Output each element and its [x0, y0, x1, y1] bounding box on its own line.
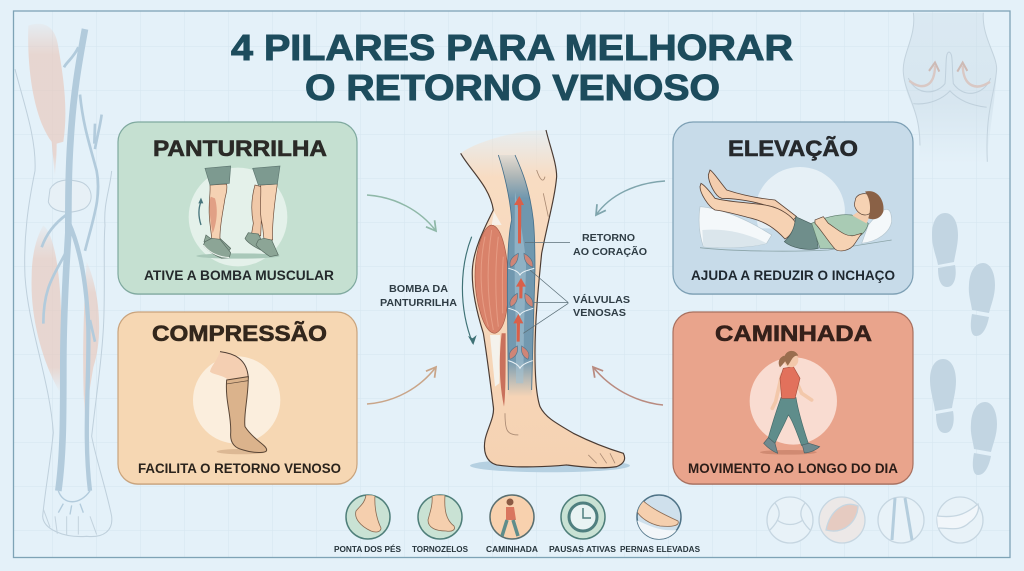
arrow: elevação to leg [596, 181, 665, 215]
label: retorno ao coração: RETORNO [582, 233, 635, 244]
title: O RETORNO VENOSO [305, 67, 720, 108]
arrow: compressão to leg [367, 367, 436, 404]
vein flow arrows [513, 196, 526, 342]
label: bomba da panturrilha [380, 284, 457, 309]
icon: pernas elevadas [620, 495, 700, 554]
venous valves [509, 253, 533, 359]
icon: calf raise legs [189, 166, 287, 266]
icon: compression stocking [193, 352, 280, 454]
heading: elevação: ELEVAÇÃO [728, 136, 858, 161]
label: retorno ao coração: AO CORAÇÃO [573, 245, 647, 258]
icon: caminhada [486, 495, 538, 554]
caption: caminhada: MOVIMENTO AO LONGO DO DIA [688, 461, 898, 476]
panel: elevação [673, 122, 913, 295]
heading: compressão: COMPRESSÃO [152, 321, 327, 346]
caption: compressão: FACILITA O RETORNO VENOSO [138, 461, 341, 476]
calf muscle [475, 212, 508, 333]
panel: panturrilha [118, 122, 357, 295]
caption: panturrilha: ATIVE A BOMBA MUSCULAR [144, 268, 334, 283]
background illustration: leg anatomy [15, 24, 112, 537]
icon: tornozelos: TORNOZELOS [412, 544, 468, 554]
label: bomba da panturrilha: BOMBA DA [389, 284, 448, 295]
caption: elevação: AJUDA A REDUZIR O INCHAÇO [691, 268, 895, 283]
icon: tornozelos [412, 495, 468, 554]
title: 4 PILARES PARA MELHORAR [231, 27, 793, 68]
panel: caminhada [673, 312, 913, 485]
label: válvulas venosas: VÁLVULAS [573, 293, 630, 306]
icon: person with raised legs [699, 167, 892, 251]
arrow: panturrilha to leg [367, 195, 436, 231]
background illustration: knee with arrows [903, 13, 997, 164]
central leg illustration [461, 130, 630, 472]
icon: pausas ativas [549, 495, 616, 554]
leader lines [523, 243, 570, 333]
background icons: bottom right [767, 497, 983, 543]
heading: caminhada: CAMINHADA [715, 321, 872, 346]
icon: ponta dos pés [334, 495, 401, 554]
icon: caminhada: CAMINHADA [486, 544, 538, 554]
vein [498, 155, 535, 397]
label: válvulas venosas [573, 293, 630, 319]
title [231, 27, 793, 108]
icon: walking woman [750, 351, 837, 455]
background illustration: footprints [930, 213, 997, 475]
label: válvulas venosas: VENOSAS [573, 307, 626, 319]
icon: pernas elevadas: PERNAS ELEVADAS [620, 544, 700, 554]
arrow: caminhada to leg [593, 367, 663, 405]
label: bomba da panturrilha: PANTURRILHA [380, 298, 457, 309]
panel: compressão [118, 312, 357, 485]
label: retorno ao coração [573, 233, 647, 258]
icon: pausas ativas: PAUSAS ATIVAS [549, 544, 616, 554]
icon: ponta dos pés: PONTA DOS PÉS [334, 544, 401, 554]
heading: panturrilha: PANTURRILHA [153, 136, 327, 161]
bottom icon row [334, 495, 700, 554]
arrow: calf pump [462, 237, 477, 345]
